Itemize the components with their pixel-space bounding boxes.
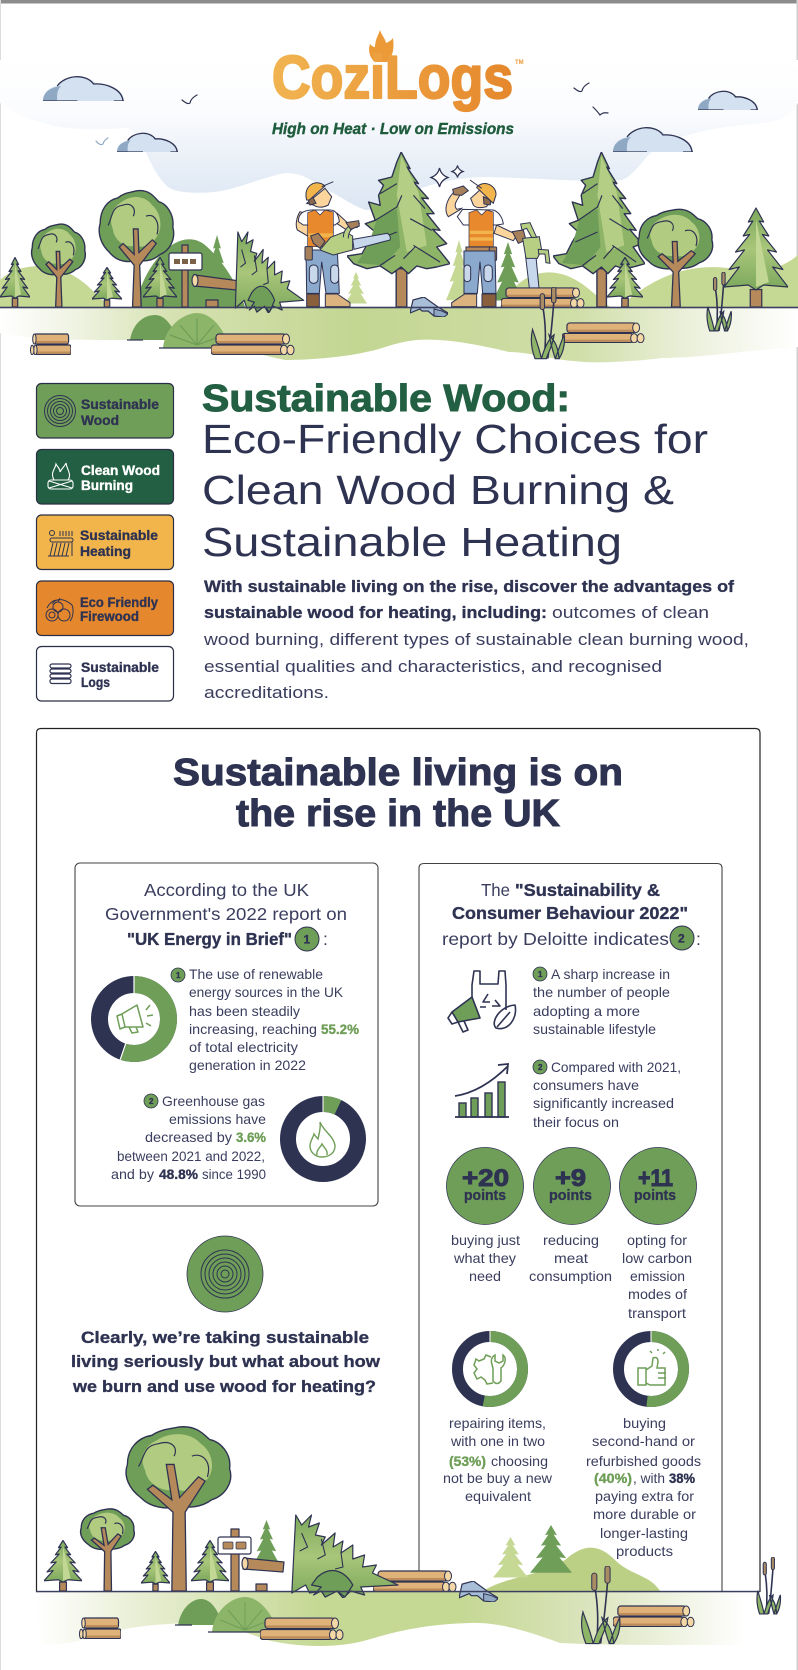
- bushes: [127, 313, 229, 348]
- heading regular lines: Clean Wood Burning &: [202, 467, 674, 513]
- stat: +11 points: low carbon: [622, 1250, 692, 1266]
- text: greenhouse gas: 2: [149, 1097, 154, 1106]
- text: second-hand goods: (40%): [594, 1470, 632, 1486]
- text: compared with 2021: 2: [538, 1063, 543, 1072]
- text: sharp increase: adopting a more: [533, 1003, 640, 1019]
- text: repairing items: [443, 1415, 553, 1504]
- callout question: [71, 1328, 381, 1396]
- bottom log piles: [80, 1606, 694, 1640]
- bottom bushes: [175, 1597, 278, 1632]
- callout question: living seriously but what about how: [71, 1352, 381, 1371]
- button: sustainable wood: [36, 384, 174, 438]
- text: renewable energy: increasing, reaching: [189, 1021, 317, 1037]
- text: second-hand goods: [586, 1415, 701, 1559]
- stat: +9 points: points: [549, 1187, 592, 1204]
- panel heading: The: [481, 880, 510, 900]
- donut: repairing items: [458, 1330, 522, 1402]
- panel heading: Consumer Behaviour 2022": [452, 903, 688, 923]
- button: eco friendly firewood: [36, 581, 174, 636]
- rock: [410, 297, 448, 317]
- stat: +9 points: consumption: [529, 1268, 612, 1284]
- text: repairing items: (53%): [449, 1453, 486, 1469]
- text: second-hand goods: products: [616, 1543, 673, 1559]
- text: second-hand goods: more durable or: [593, 1506, 696, 1522]
- panel title: [173, 752, 623, 835]
- sign post: [169, 245, 202, 307]
- panel heading: :: [323, 929, 328, 949]
- text: second-hand goods: paying extra for: [595, 1488, 694, 1504]
- logo wordmark: CoziLogs: [272, 44, 513, 111]
- sparkles: [431, 166, 463, 187]
- text: compared with 2021: their focus on: [533, 1114, 619, 1130]
- button: eco friendly firewood: Firewood: [80, 609, 139, 624]
- panel: Deloitte report: [419, 864, 722, 1591]
- intro paragraph: [203, 577, 749, 702]
- stat: +20 points: [446, 1148, 524, 1284]
- intro paragraph: accreditations.: [204, 683, 329, 702]
- text: greenhouse gas: and by: [111, 1166, 154, 1182]
- panel heading: "UK Energy in Brief": [127, 929, 292, 949]
- text: second-hand goods: , with: [633, 1470, 665, 1486]
- icon: thumbs up: [638, 1349, 666, 1385]
- small trees right: [607, 208, 788, 307]
- bottom hill and pines: [483, 1525, 660, 1591]
- clouds: [43, 77, 758, 152]
- text: second-hand goods: longer-lasting: [600, 1525, 688, 1541]
- background hills: [0, 235, 798, 307]
- text: renewable energy: [171, 966, 360, 1073]
- text: greenhouse gas: Greenhouse gas: [162, 1093, 265, 1109]
- heading regular lines: [202, 416, 708, 565]
- panel heading: report by Deloitte indicates: [442, 929, 669, 949]
- panel title: Sustainable living is on: [173, 752, 623, 794]
- intro paragraph: wood burning, different types of sustainable clean burning wood,: [203, 630, 749, 649]
- icon: megaphone: [117, 1005, 153, 1033]
- icon: growth chart: [455, 1064, 509, 1117]
- center pine: [347, 152, 450, 307]
- text: sharp increase: sustainable lifestyle: [533, 1021, 656, 1037]
- intro paragraph: essential qualities and characteristics, and recognised: [204, 657, 662, 676]
- panel heading: [105, 880, 347, 951]
- button: clean wood burning: [36, 450, 174, 504]
- intro paragraph: sustainable wood for heating, including:: [204, 603, 547, 622]
- text: greenhouse gas: between 2021 and 2022,: [117, 1148, 265, 1164]
- main heading: [202, 378, 708, 565]
- panel heading: :: [696, 929, 701, 949]
- text: sharp increase: 1: [538, 970, 543, 979]
- logo flame: [369, 30, 393, 62]
- heading regular lines: Eco-Friendly Choices for: [202, 416, 708, 462]
- panel heading: Government's 2022 report on: [105, 904, 347, 924]
- text: sharp increase: [533, 966, 670, 1037]
- button: clean wood burning: Clean Wood: [81, 463, 160, 478]
- trademark: TM: [515, 60, 524, 66]
- stat: +20 points: +20: [462, 1165, 509, 1192]
- stat: +11 points: opting for: [627, 1232, 687, 1248]
- button: sustainable logs: Logs: [81, 675, 110, 690]
- text: greenhouse gas: [111, 1093, 267, 1182]
- text: greenhouse gas: emissions have: [169, 1111, 266, 1127]
- log pile right: [501, 288, 584, 308]
- stat: +9 points: meat: [554, 1250, 588, 1266]
- callout question: Clearly, we’re taking sustainable: [81, 1328, 369, 1347]
- text: renewable energy: of total electricity: [189, 1039, 298, 1055]
- worker 1 with chainsaw: [296, 182, 390, 307]
- stat: +20 points: what they: [453, 1250, 516, 1266]
- navigation buttons: [36, 384, 174, 701]
- panel title: the rise in the UK: [236, 793, 561, 835]
- logo: [272, 30, 524, 138]
- text: renewable energy: 55.2%: [321, 1021, 360, 1037]
- stat: +11 points: modes of: [628, 1286, 687, 1302]
- donut: second-hand goods: [618, 1330, 684, 1402]
- stat: +11 points: [620, 1148, 696, 1321]
- text: second-hand goods: 38%: [669, 1470, 696, 1486]
- button: sustainable wood: Wood: [81, 413, 119, 428]
- intro paragraph: With sustainable living on the rise, discover the advantages of: [204, 577, 734, 596]
- worker 2 with chainsaw: [446, 180, 550, 307]
- stat: +20 points: need: [469, 1268, 501, 1284]
- ground line: [0, 307, 798, 308]
- text: repairing items: repairing items,: [449, 1415, 546, 1431]
- panel heading: 1: [304, 932, 310, 946]
- text: renewable energy: 1: [176, 971, 181, 980]
- icon: wood rings badge: [187, 1236, 263, 1312]
- panel heading: According to the UK: [144, 880, 309, 900]
- stat: +9 points: reducing: [543, 1232, 599, 1248]
- button: sustainable heating: [36, 515, 174, 570]
- main panel outline: [36, 728, 760, 1592]
- bottom illustration: [36, 1427, 780, 1646]
- button: sustainable logs: Sustainable: [81, 660, 159, 675]
- bottom reeds: [582, 1557, 780, 1644]
- panel heading: "Sustainability &: [515, 880, 660, 900]
- button: sustainable heating: Sustainable: [80, 528, 158, 543]
- button: sustainable heating: Heating: [80, 544, 131, 559]
- panel heading: 2: [678, 932, 685, 946]
- bottom ground line: [36, 1591, 760, 1592]
- text: sharp increase: A sharp increase in: [551, 966, 670, 982]
- text: repairing items: with one in two: [450, 1433, 545, 1449]
- button: sustainable wood: Sustainable: [81, 397, 159, 412]
- text: compared with 2021: [533, 1059, 681, 1130]
- button: clean wood burning: Burning: [81, 478, 133, 493]
- hero illustration: [0, 60, 798, 362]
- text: renewable energy: has been steadily: [189, 1003, 300, 1019]
- bottom trees: [44, 1427, 280, 1591]
- bottom rock: [459, 1581, 498, 1602]
- heading bold line: Sustainable Wood:: [202, 378, 570, 420]
- button: sustainable logs: [36, 646, 174, 701]
- text: repairing items: choosing: [491, 1453, 548, 1469]
- text: compared with 2021: consumers have: [533, 1077, 639, 1093]
- trees left: [0, 191, 177, 307]
- text: repairing items: equivalent: [465, 1488, 531, 1504]
- text: greenhouse gas: since 1990: [202, 1166, 266, 1182]
- log piles: [30, 323, 644, 355]
- text: second-hand goods: refurbished goods: [586, 1453, 701, 1469]
- text: repairing items: not be buy a new: [443, 1470, 553, 1486]
- donut: 55.2% renewable: [100, 975, 168, 1060]
- stat: +11 points: points: [634, 1187, 676, 1204]
- stat: +9 points: [529, 1148, 612, 1284]
- panel heading: [442, 880, 701, 950]
- text: greenhouse gas: 3.6%: [236, 1129, 267, 1145]
- stat: +11 points: transport: [628, 1305, 686, 1321]
- button: eco friendly firewood: Eco Friendly: [80, 595, 158, 610]
- right pine: [553, 152, 645, 307]
- text: compared with 2021: significantly increased: [533, 1095, 674, 1111]
- icon: recycling bag with megaphone: [448, 971, 516, 1032]
- stat: +11 points: +11: [638, 1165, 673, 1192]
- donut: emissions: [288, 1095, 358, 1174]
- reeds: [531, 272, 731, 359]
- text: second-hand goods: second-hand or: [592, 1433, 695, 1449]
- bottom ground: [36, 1592, 745, 1646]
- intro paragraph: outcomes of clean: [552, 603, 709, 622]
- icon: gear and wrench: [474, 1355, 505, 1384]
- text: renewable energy: energy sources in the UK: [189, 984, 344, 1000]
- callout question: we burn and use wood for heating?: [72, 1377, 376, 1396]
- stat: +20 points: buying just: [451, 1232, 520, 1248]
- text: compared with 2021: Compared with 2021,: [551, 1059, 681, 1075]
- text: sharp increase: the number of people: [533, 984, 670, 1000]
- fallen tree: [192, 232, 304, 313]
- stat: +11 points: emission: [630, 1268, 685, 1284]
- stat: +9 points: +9: [555, 1165, 586, 1192]
- panel: UK Energy in Brief: [75, 863, 378, 1206]
- heading regular lines: Sustainable Heating: [202, 519, 622, 565]
- tagline: High on Heat · Low on Emissions: [272, 121, 514, 138]
- sky: [0, 60, 798, 210]
- text: greenhouse gas: 48.8%: [159, 1166, 199, 1182]
- bottom sign post: [218, 1529, 251, 1591]
- ground: [0, 308, 798, 362]
- text: renewable energy: generation in 2022: [189, 1057, 306, 1073]
- stat: +20 points: points: [464, 1187, 506, 1204]
- bottom fallen tree: [242, 1515, 456, 1598]
- text: renewable energy: The use of renewable: [189, 966, 323, 982]
- text: second-hand goods: buying: [623, 1415, 666, 1431]
- icon: flame: [310, 1122, 335, 1157]
- birds: [96, 83, 608, 145]
- text: greenhouse gas: decreased by: [145, 1129, 232, 1145]
